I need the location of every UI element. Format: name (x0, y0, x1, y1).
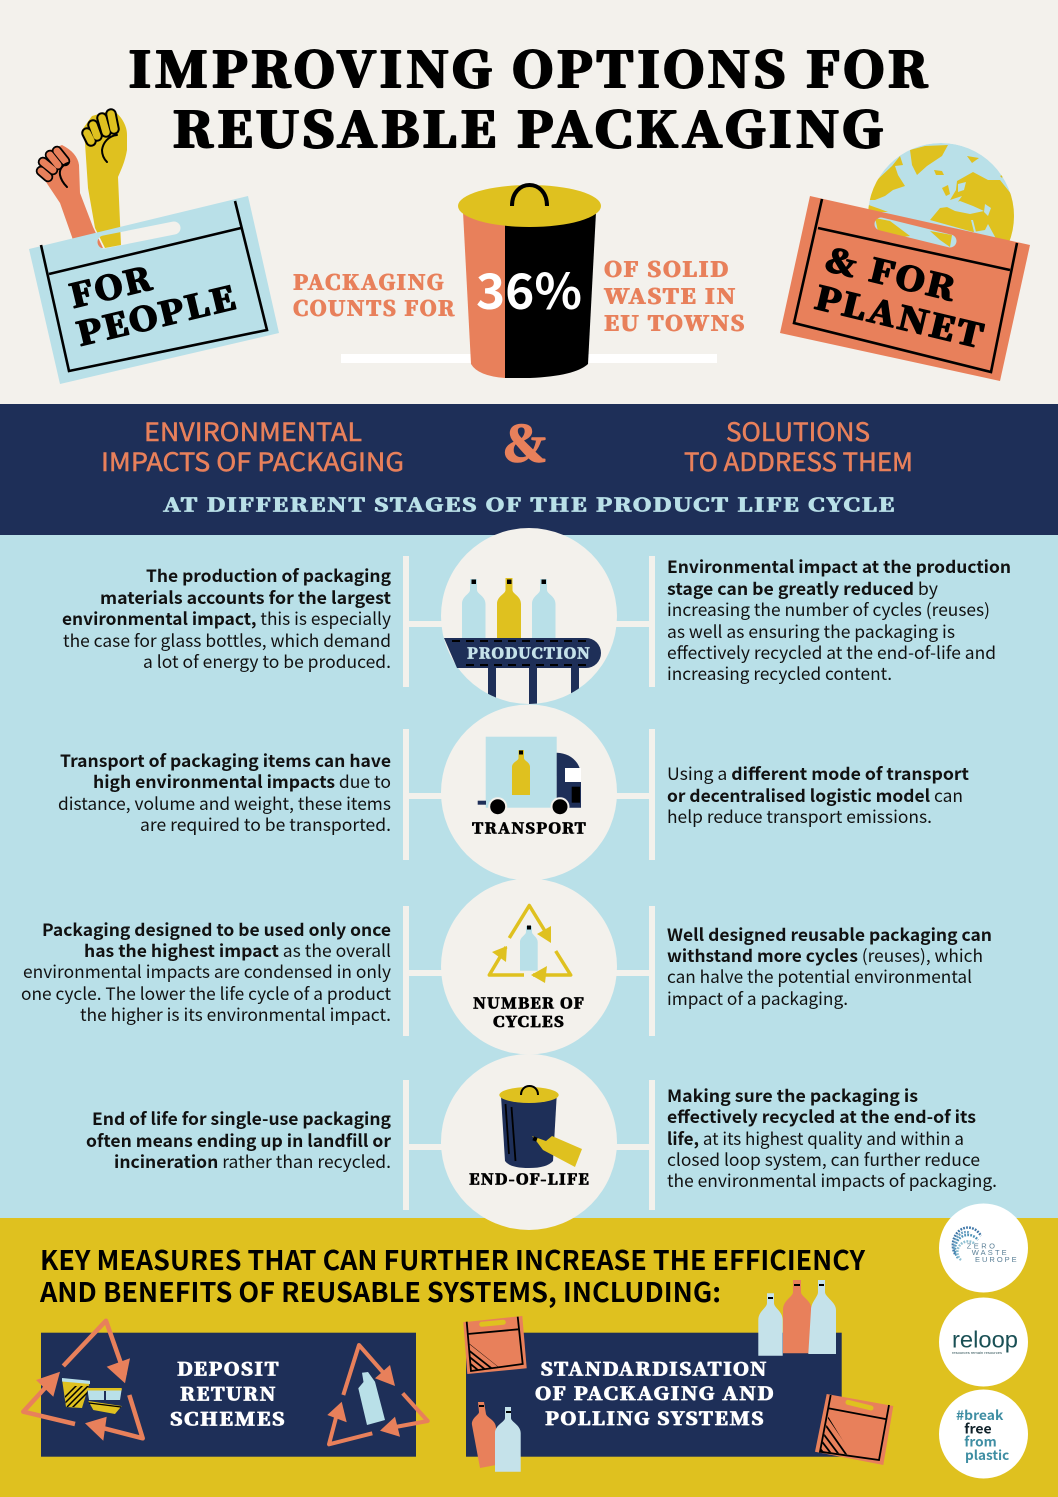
text block: production impact: the case for glass bottles, which demand (63, 627, 391, 652)
text block: end of life solution: effectively recycled at the end-of its (667, 1103, 976, 1128)
icon: crate bottom right (815, 1394, 893, 1465)
text block: end of life solution: the environmental impacts of packaging. (667, 1167, 997, 1192)
panel: for people bag (29, 196, 279, 384)
text block: production solution: effectively recycled at the end-of-life and (667, 639, 996, 664)
text block: transport impact: high environmental impacts due to (93, 768, 391, 793)
text block: cycles solution: withstand more cycles (reuses), which (667, 942, 983, 967)
icon: right recycling triangle with bottle (327, 1345, 428, 1444)
heading: environmental impacts: ENVIRONMENTAL (144, 413, 362, 449)
text: standardisation (535, 1356, 775, 1431)
text block: cycles impact (21, 916, 392, 1026)
logo: break free from plastic: from (964, 1432, 997, 1451)
heading: solutions: SOLUTIONS (726, 413, 870, 449)
text: of solid waste in EU towns: WASTE IN (604, 280, 737, 310)
text block: cycles impact: one cycle. The lower the life cycle of a product (21, 980, 392, 1005)
text block: transport solution: help reduce transport emissions. (667, 803, 932, 828)
text block: end of life impact (86, 1105, 392, 1173)
icon: bottles bottom left (472, 1402, 521, 1472)
panel: and for planet bag (780, 196, 1030, 381)
text block: transport impact: distance, volume and weight, these items (58, 790, 391, 815)
illustration: globe (868, 143, 1014, 248)
text block: cycles solution: Well designed reusable packaging can (667, 921, 992, 946)
logo: zero waste europe (939, 1204, 1028, 1292)
text block: transport impact (58, 747, 391, 836)
text block: cycles solution (667, 921, 992, 1010)
text: deposit return schemes (170, 1356, 286, 1432)
circle: end of life: END-OF-LIFE (469, 1168, 590, 1190)
text block: production solution: increasing recycled content. (667, 660, 892, 685)
heading: solutions: TO ADDRESS THEM (684, 443, 913, 479)
subheading: life cycle stages: AT DIFFERENT STAGES OF THE PRODUCT LIFE CYCLE (163, 492, 896, 518)
circle: number of cycles: NUMBER OF (473, 992, 585, 1014)
text block: production impact: materials accounts for the largest (100, 584, 391, 609)
text: deposit return schemes: RETURN (180, 1380, 277, 1406)
circle: transport (441, 704, 617, 880)
text block: production solution: increasing the number of cycles (reuses) (667, 596, 990, 621)
text block: end of life impact: incineration rather than recycled. (114, 1148, 391, 1173)
background: header area (0, 0, 1058, 404)
heading: key measures: AND BENEFITS OF REUSABLE SYSTEMS, INCLUDING: (39, 1271, 721, 1310)
text block: production impact: environmental impact, this is especially (62, 605, 391, 630)
logo: break free from plastic: plastic (965, 1445, 1009, 1464)
text block: cycles solution: can halve the potential environmental (667, 963, 972, 988)
text block: production solution (667, 553, 1011, 685)
circle: end of life (441, 1054, 617, 1230)
heading: environmental impacts: IMPACTS OF PACKAGING (101, 443, 404, 479)
heading: solutions (684, 413, 913, 479)
circle: transport: TRANSPORT (472, 818, 587, 838)
text: packaging counts for: PACKAGING (293, 266, 445, 296)
panel: blue life cycle section (0, 535, 1058, 1219)
logo: zero waste europe: EUROPE (975, 1255, 1017, 1264)
panel: navy heading band (0, 404, 1058, 535)
text block: transport solution: or decentralised logistic model can (667, 782, 963, 807)
text block: end of life solution: closed loop system, can further reduce (667, 1146, 980, 1171)
text: packaging counts for: COUNTS FOR (293, 292, 456, 322)
text block: production solution: Environmental impact at the production (667, 553, 1011, 578)
text: of solid waste in EU towns: EU TOWNS (604, 308, 746, 336)
text block: cycles impact: has the highest impact as the overall (84, 937, 391, 962)
logo: reloop (939, 1298, 1028, 1386)
panel: and for planet bag: PLANET (811, 273, 991, 358)
panel: yellow measures section (0, 1218, 1058, 1497)
text: standardisation: OF PACKAGING AND (535, 1380, 775, 1406)
text block: end of life solution (667, 1082, 997, 1192)
logo: reloop: resources remain resources (952, 1350, 1002, 1355)
title: REUSABLE PACKAGING (172, 92, 886, 161)
icon: bottles top right (758, 1280, 836, 1356)
circle: number of cycles (441, 878, 617, 1054)
text: deposit return schemes: SCHEMES (170, 1406, 286, 1432)
heading: key measures (39, 1239, 865, 1310)
heading: key measures: KEY MEASURES THAT CAN FURTHER INCREASE THE EFFICIENCY (40, 1239, 865, 1278)
text: of solid waste in EU towns (604, 254, 746, 336)
icon: crate top left (462, 1316, 527, 1375)
text: standardisation: POLLING SYSTEMS (545, 1405, 765, 1431)
text: of solid waste in EU towns: OF SOLID (604, 254, 730, 282)
logo: zero waste europe: ZERO (967, 1241, 995, 1250)
heading: environmental impacts (101, 413, 404, 479)
text block: end of life solution: life, at its highest quality and within a (667, 1125, 964, 1150)
logo: break free from plastic (939, 1390, 1028, 1478)
illustration: bin with 36 percent: 36% (476, 253, 582, 324)
title: IMPROVING OPTIONS FOR (128, 32, 932, 101)
circle: number of cycles: CYCLES (493, 1011, 565, 1032)
text block: end of life impact: often means ending up in landfill or (86, 1127, 392, 1152)
panel: deposit return schemes (23, 1321, 428, 1457)
text: packaging counts for (293, 266, 456, 322)
text block: cycles solution: impact of a packaging. (667, 985, 848, 1010)
circle: production (441, 528, 617, 708)
title (128, 32, 932, 161)
text block: production solution: as well as ensuring the packaging is (667, 618, 955, 643)
decorative white shelf under bin (341, 354, 717, 363)
text block: cycles impact: the higher is its environmental impact. (80, 1001, 391, 1026)
text block: transport solution (667, 760, 969, 828)
text block: production impact: The production of packaging (146, 562, 391, 587)
text block: transport impact: are required to be transported. (140, 811, 391, 836)
connector brackets (403, 556, 655, 1210)
panel: and for planet bag: & FOR (822, 235, 963, 311)
circle: production: PRODUCTION (467, 642, 591, 664)
text block: production impact (62, 562, 391, 673)
logo: reloop: reloop (952, 1326, 1018, 1352)
ampersand: & (504, 406, 550, 475)
text block: end of life solution: Making sure the packaging is (667, 1082, 918, 1107)
panel: standardisation of packaging and polling systems (462, 1280, 893, 1472)
text block: transport impact: Transport of packaging items can have (60, 747, 391, 772)
icon: left recycling triangle with containers (23, 1321, 143, 1441)
logo: break free from plastic: free (964, 1418, 992, 1437)
text block: end of life impact: End of life for single-use packaging (92, 1105, 391, 1130)
logo: zero waste europe: WASTE (972, 1248, 1007, 1257)
panel: for people bag: PEOPLE (72, 273, 242, 356)
text block: cycles impact: environmental impacts are condensed in only (23, 958, 391, 983)
text block: production solution: stage can be greatly reduced by (667, 575, 938, 600)
text block: cycles impact: Packaging designed to be used only once (42, 916, 391, 941)
text: deposit return schemes: DEPOSIT (177, 1356, 280, 1382)
illustration: bin with 36 percent (458, 185, 601, 378)
illustration: raised fists (38, 110, 127, 250)
text block: transport solution: Using a different mode of transport (667, 760, 969, 785)
panel: for people bag: FOR (65, 253, 158, 318)
text block: production impact: a lot of energy to be produced. (143, 648, 391, 673)
logo: break free from plastic: #break (956, 1405, 1003, 1424)
text: standardisation: STANDARDISATION (541, 1356, 768, 1382)
